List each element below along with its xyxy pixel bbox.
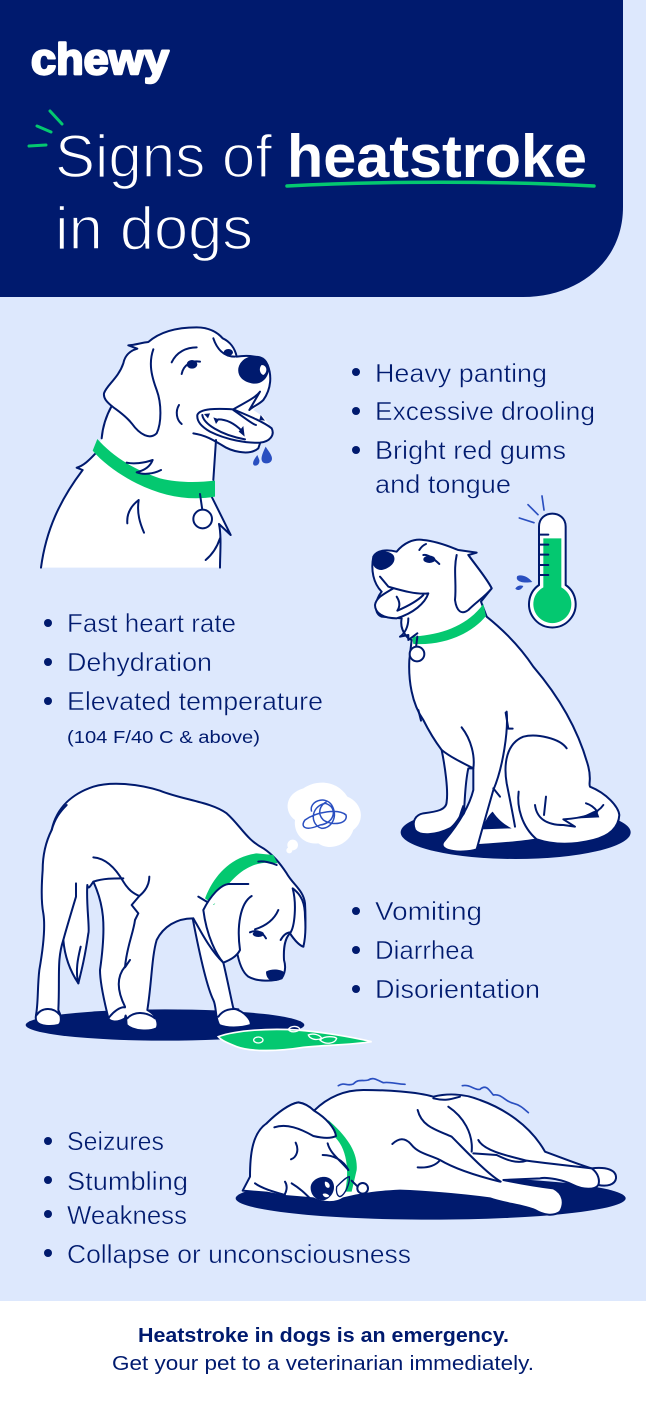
- text block: vomiting signs: Disorientation: [375, 974, 540, 1004]
- collar tag: [410, 637, 424, 661]
- eye and brow: [250, 910, 290, 940]
- panel: dog collapsed: [236, 1079, 626, 1220]
- hind leg and haunch: [442, 727, 474, 768]
- collar: [205, 853, 278, 905]
- dog body: [243, 1090, 616, 1215]
- nose: [238, 356, 269, 384]
- collar: [93, 439, 215, 498]
- title underline: [287, 182, 594, 186]
- text block: collapse signs: [44, 1126, 411, 1269]
- footer bold message: Heatstroke in dogs is an emergency.: [138, 1324, 509, 1347]
- ear: [455, 555, 492, 612]
- ear: [203, 884, 252, 963]
- panel: dog panting: [41, 327, 273, 568]
- shadow gaps: [457, 805, 599, 829]
- ear: [267, 1102, 336, 1138]
- text block: heart rate signs: (104 F/40 C & above): [67, 727, 260, 747]
- text block: panting signs: [352, 358, 595, 499]
- vomit puddle: [218, 1026, 372, 1051]
- title: heatstroke: [287, 123, 587, 190]
- nose: [372, 551, 394, 570]
- leg lines: [93, 857, 149, 896]
- collar tag: [352, 1181, 368, 1194]
- icon: drool drops: [253, 447, 272, 466]
- icon: thought bubble: [286, 783, 361, 853]
- tongue and mouth: [375, 577, 428, 618]
- neck fur: [400, 618, 417, 640]
- text block: panting signs: Heavy panting: [375, 358, 547, 388]
- chewy logo: chewy: [31, 35, 170, 84]
- title: Signs of: [55, 123, 272, 190]
- chest fur: [418, 710, 421, 721]
- ear: [112, 349, 160, 436]
- text block: heart rate signs: Elevated temperature: [67, 686, 323, 716]
- collar tag: [193, 494, 212, 528]
- text block: heart rate signs: Dehydration: [67, 647, 212, 677]
- text block: heart rate signs: Fast heart rate: [67, 608, 236, 638]
- text block: vomiting signs: [352, 896, 540, 1004]
- dog body: [41, 327, 273, 568]
- eye and brow: [419, 544, 439, 564]
- text block: panting signs: Bright red gums: [375, 435, 566, 465]
- text block: heart rate signs: [44, 608, 323, 747]
- title: in dogs: [55, 195, 253, 262]
- nose: [266, 970, 284, 981]
- text block: collapse signs: Weakness: [67, 1200, 187, 1230]
- eye and brow: [172, 338, 235, 374]
- dog body: [36, 784, 305, 1031]
- panel: dog vomiting: [26, 783, 372, 1051]
- text block: collapse signs: Collapse or unconsciousness: [67, 1239, 411, 1269]
- collar: [412, 604, 486, 644]
- dog body: [372, 540, 619, 852]
- footer instruction: Get your pet to a veterinarian immediately.: [112, 1352, 534, 1375]
- sparkle accent: [29, 111, 62, 146]
- tremor lines: [338, 1079, 528, 1113]
- text block: collapse signs: Stumbling: [67, 1166, 188, 1196]
- collar: [328, 1120, 357, 1192]
- eye and jaw: [255, 1143, 348, 1198]
- text block: panting signs: Excessive drooling: [375, 396, 595, 426]
- panel: dog sitting: [372, 540, 631, 859]
- tail fur: [518, 792, 603, 839]
- text block: collapse signs: Seizures: [67, 1126, 164, 1156]
- chest fur: [127, 500, 144, 533]
- header panel: [0, 0, 623, 297]
- title: [55, 123, 587, 262]
- text block: vomiting signs: Vomiting: [375, 896, 482, 926]
- footer panel: [0, 1301, 646, 1406]
- far ear: [290, 888, 305, 947]
- text block: panting signs: and tongue: [375, 469, 511, 499]
- shadow: [401, 806, 631, 859]
- text block: vomiting signs: Diarrhea: [375, 935, 475, 965]
- leg lines: [418, 1110, 501, 1182]
- shadow: [26, 1009, 304, 1041]
- nose: [311, 1177, 334, 1200]
- icon: thermometer: [515, 496, 576, 627]
- mouth and tongue: [197, 409, 273, 443]
- shadow: [236, 1177, 626, 1220]
